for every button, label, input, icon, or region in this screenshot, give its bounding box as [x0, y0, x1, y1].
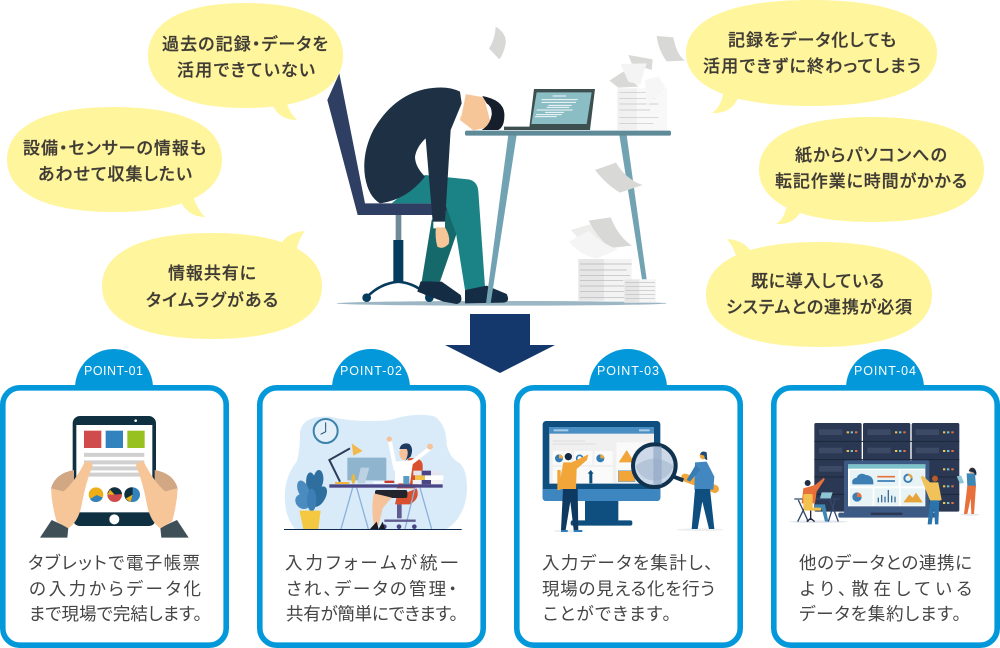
- icon: server racks with team and laptop dashboard: [789, 423, 980, 524]
- speech bubble: time lag: タイムラグがある: [146, 290, 278, 310]
- speech bubble: system integration: 既に導入している: [751, 272, 884, 291]
- speech bubble: sensor information: あわせて収集したい: [38, 165, 192, 184]
- speech bubble: digitized data unused: [686, 0, 937, 113]
- text: point 02 description: され、データの管理・: [286, 579, 457, 599]
- panel: point 04: POINT-04: [854, 364, 916, 378]
- text: point 04 description: データを集約します。: [799, 604, 961, 624]
- panel: point 03: POINT-03: [597, 364, 659, 378]
- speech bubble: system integration: [706, 239, 932, 347]
- panel: point 03: [517, 349, 740, 645]
- illustration: exhausted worker slumped over desk: [327, 27, 685, 306]
- speech bubble: sensor information: [7, 107, 222, 217]
- text: point 03 description: 現場の見える化を行う: [542, 579, 715, 599]
- text: point 04 description: 他のデータとの連携に: [799, 553, 972, 573]
- icon: hands holding tablet: [40, 416, 189, 538]
- speech bubble: past records: [148, 3, 343, 120]
- icon: relaxed office worker at desk: [284, 415, 467, 530]
- text: point 03 description: 入力データを集計し、: [542, 553, 713, 573]
- icon: analysts at monitor with magnifying glass: [543, 421, 724, 532]
- text: point 01 description: の入力からデータ化: [29, 579, 201, 599]
- text: point 03 description: [542, 553, 715, 624]
- panel: point 01: [3, 349, 226, 645]
- speech bubble: paper to PC: 紙からパソコンへの: [795, 146, 947, 165]
- speech bubble: past records: 活用できていない: [177, 61, 315, 80]
- text: point 02 description: 共有が簡単にできます。: [286, 604, 458, 624]
- speech bubble: digitized data unused: 記録をデータ化しても: [728, 30, 896, 50]
- text: point 03 description: ことができます。: [543, 604, 671, 624]
- text: point 04 description: より、散在している: [800, 579, 972, 599]
- panel: point 01: POINT-01: [84, 364, 143, 378]
- text: point 01 description: まで現場で完結します。: [29, 604, 202, 624]
- speech bubble: paper to PC: [759, 117, 984, 224]
- speech bubble: sensor information: 設備・センサーの情報も: [23, 139, 206, 158]
- arrow: down to solutions: [445, 314, 555, 373]
- speech bubble: time lag: 情報共有に: [168, 264, 256, 283]
- text: point 02 description: 入力フォームが統一: [285, 553, 458, 573]
- speech bubble: past records: 過去の記録・データを: [162, 34, 328, 54]
- text: point 02 description: [285, 553, 458, 624]
- speech bubble: system integration: システムとの連携が必須: [726, 297, 912, 317]
- speech bubble: time lag: [102, 231, 322, 339]
- panel: point 04: [774, 349, 997, 645]
- text: point 04 description: [799, 553, 972, 624]
- panel: point 02: [260, 349, 483, 645]
- panel: point 02: POINT-02: [340, 364, 402, 378]
- speech bubble: digitized data unused: 活用できずに終わってしまう: [703, 57, 921, 76]
- speech bubble: paper to PC: 転記作業に時間がかかる: [775, 171, 967, 191]
- text: point 01 description: タブレットで電子帳票: [28, 553, 200, 573]
- text: point 01 description: [28, 553, 202, 624]
